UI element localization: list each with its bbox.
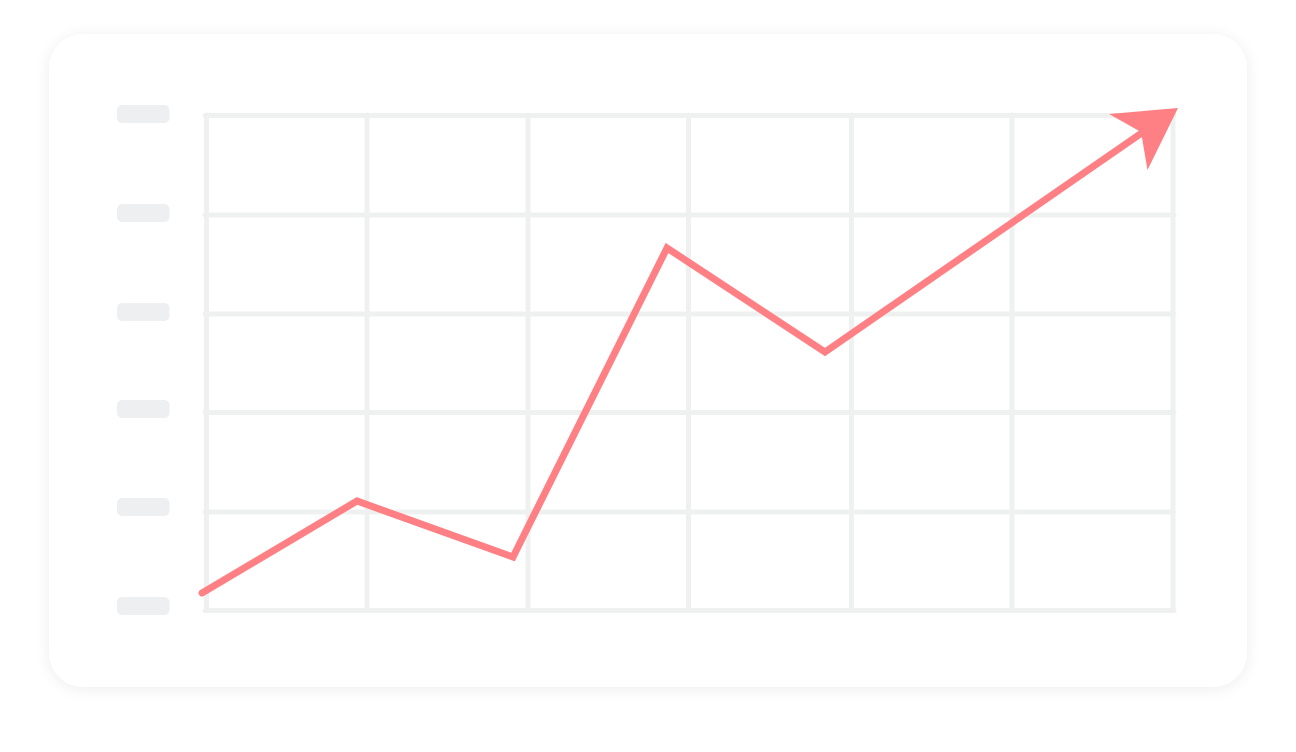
chart grid (205, 115, 1174, 610)
arrow head (1109, 108, 1178, 170)
y-axis tick placeholders (117, 105, 170, 615)
trend line (202, 130, 1146, 593)
